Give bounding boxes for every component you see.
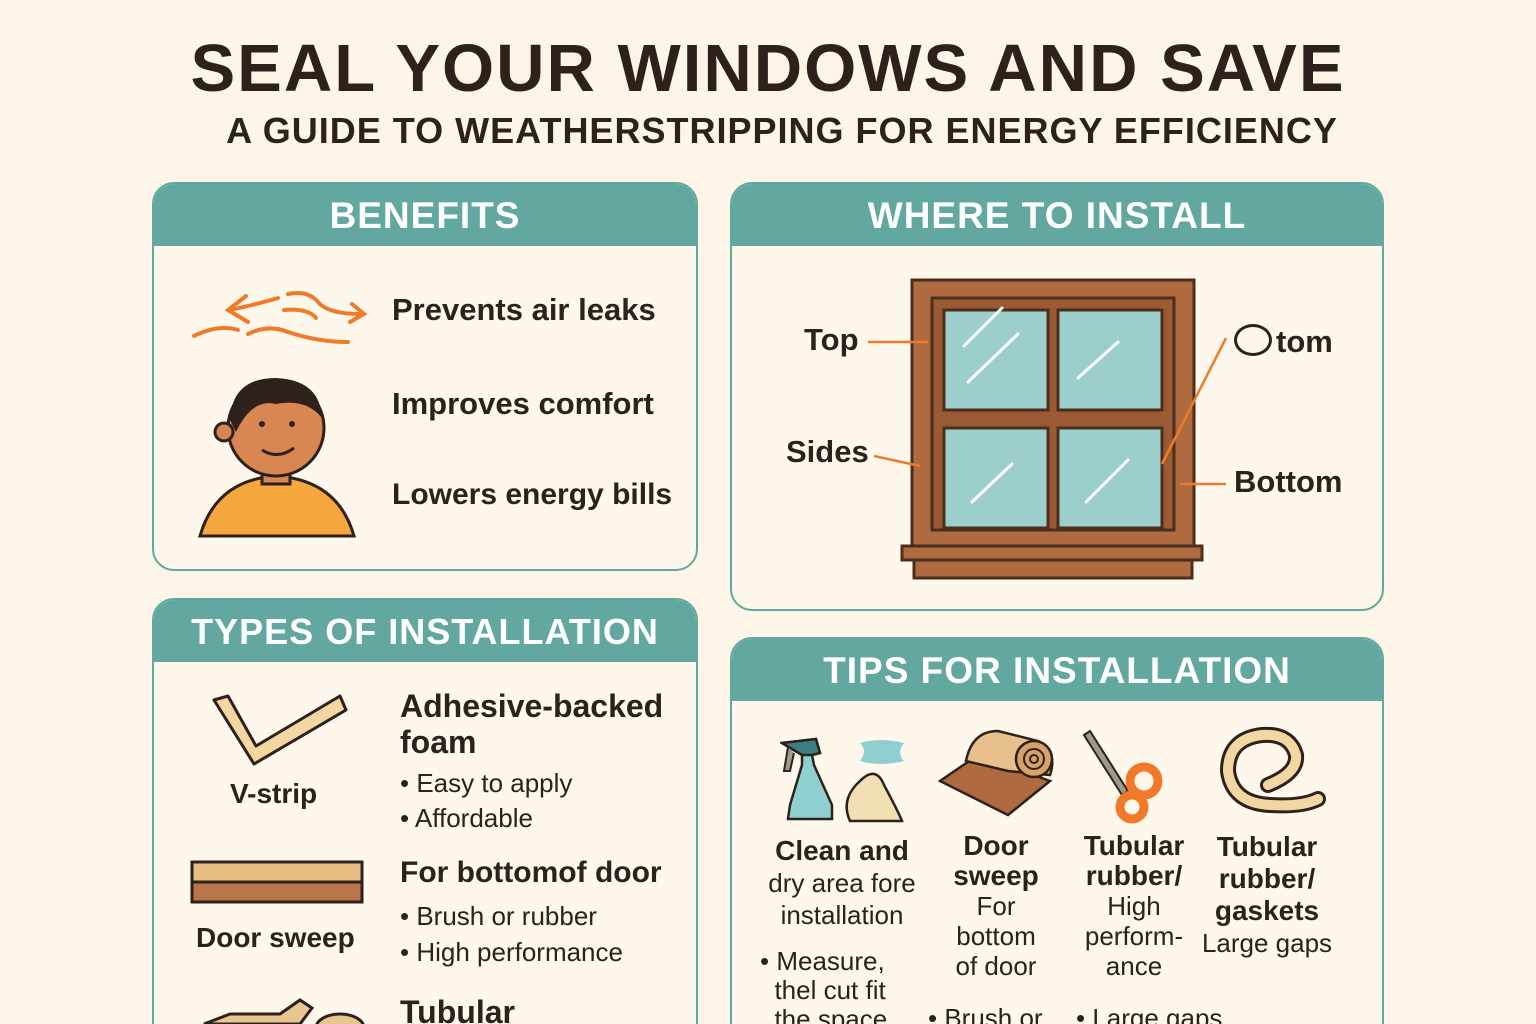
text: lowers energy bills: Lowers energy bills bbox=[392, 478, 672, 511]
subtitle: A GUIDE TO WEATHERSTRIPPING FOR ENERGY EFFICIENCY bbox=[226, 110, 1338, 151]
icon: person bbox=[198, 378, 356, 538]
text: improves comfort: Improves comfort bbox=[392, 386, 654, 421]
label: door sweep: Door sweep bbox=[196, 922, 355, 953]
bullets: foam bbox=[400, 768, 572, 833]
icon: door sweep bbox=[190, 860, 364, 904]
label: tom: tom bbox=[1276, 324, 1333, 359]
bullet: measure: • Measure, bbox=[760, 946, 885, 976]
heading: benefits bbox=[154, 184, 696, 246]
column: tubular rubber: ance bbox=[1106, 951, 1162, 981]
icon: gasket coil bbox=[1220, 726, 1326, 814]
column: door sweep: of door bbox=[956, 951, 1036, 981]
heading: types: TYPES OF INSTALLATION bbox=[191, 611, 659, 652]
column: gaskets: Tubular bbox=[1217, 831, 1317, 862]
icon: roll bbox=[938, 730, 1054, 816]
column: gaskets: rubber/ bbox=[1219, 863, 1315, 894]
column: door sweep: Door bbox=[963, 830, 1029, 861]
text: adhesive foam bbox=[400, 688, 663, 760]
label: bottom: Bottom bbox=[1234, 464, 1342, 499]
column: clean: dry area fore bbox=[768, 868, 916, 898]
column: gaskets bbox=[1202, 831, 1332, 958]
column: tubular rubber: rubber/ bbox=[1086, 860, 1182, 891]
column: tubular rubber: Tubular bbox=[1084, 830, 1184, 861]
bullets: foam: • Affordable bbox=[400, 803, 533, 833]
heading: benefits: BENEFITS bbox=[330, 195, 520, 236]
column: door sweep: sweep bbox=[953, 860, 1039, 891]
text: adhesive foam: Adhesive-backed bbox=[400, 688, 663, 724]
column: clean: Clean and bbox=[775, 835, 909, 866]
column: clean bbox=[768, 835, 916, 930]
icon: air flow arrows bbox=[192, 291, 368, 344]
column: gaskets: Large gaps bbox=[1202, 928, 1332, 958]
bullets: foam: • Easy to apply bbox=[400, 768, 572, 798]
label: v-strip: V-strip bbox=[230, 778, 317, 809]
text: for bottom of door: For bottomof door bbox=[400, 856, 662, 889]
text: adhesive foam: foam bbox=[400, 724, 476, 760]
panel: types of installation bbox=[152, 598, 698, 1024]
bullets: sweep: • Brush or rubber bbox=[400, 901, 597, 931]
bullet: measure: thel cut fit bbox=[774, 975, 886, 1005]
column: tubular rubber bbox=[1084, 830, 1184, 981]
panel: benefits bbox=[152, 182, 698, 571]
heading: where to install bbox=[732, 184, 1382, 246]
heading: types bbox=[154, 600, 696, 662]
column: tubular rubber: High bbox=[1107, 891, 1161, 921]
icon: spray and cloth bbox=[780, 738, 904, 822]
label: top: Top bbox=[804, 322, 859, 357]
heading: where to install: WHERE TO INSTALL bbox=[868, 195, 1246, 236]
label: tom bbox=[1234, 324, 1333, 359]
icon: v-strip bbox=[212, 694, 348, 766]
column: door sweep: For bbox=[976, 891, 1016, 921]
column: door sweep bbox=[953, 830, 1039, 981]
panel: where to install bbox=[730, 182, 1384, 611]
arrows: labels bbox=[868, 337, 1228, 486]
label: sides: Sides bbox=[786, 434, 869, 469]
bullets: sweep bbox=[400, 901, 623, 967]
text: prevents air leaks: Prevents air leaks bbox=[392, 292, 656, 327]
column: gaskets: gaskets bbox=[1215, 895, 1319, 926]
icon: tubular bbox=[204, 998, 365, 1024]
window diagram bbox=[900, 278, 1204, 580]
bullets: sweep: • High performance bbox=[400, 937, 623, 967]
column: tubular rubber: perform- bbox=[1085, 921, 1183, 951]
icon: scissors bbox=[1082, 730, 1162, 824]
heading: tips bbox=[732, 639, 1382, 701]
heading: tips: TIPS FOR INSTALLATION bbox=[823, 650, 1291, 691]
title: SEAL YOUR WINDOWS AND SAVE bbox=[190, 31, 1346, 106]
panel: tips bbox=[730, 637, 1384, 1024]
column: door sweep: bottom bbox=[956, 921, 1036, 951]
column: clean: installation bbox=[781, 900, 903, 930]
bullet: measure bbox=[760, 946, 887, 1024]
